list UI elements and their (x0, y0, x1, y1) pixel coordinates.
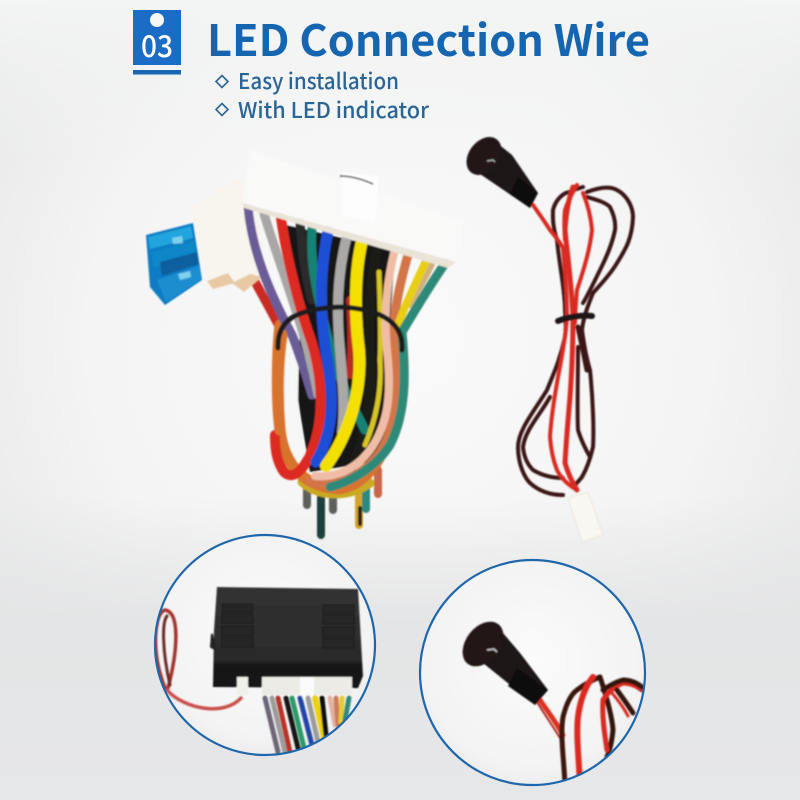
title: LED Connection Wire (207, 7, 650, 69)
bullet: Easy installation: Easy installation (238, 64, 399, 96)
wire stubs (307, 470, 378, 535)
fuse (146, 223, 202, 305)
wire bundle (248, 207, 446, 494)
circle: control box detail (155, 535, 375, 755)
colored wires (265, 698, 349, 752)
connector: main body (242, 150, 462, 268)
lamp (459, 130, 538, 208)
small tie (558, 316, 592, 321)
cable tie (278, 307, 402, 350)
black control box (213, 587, 363, 688)
white connectors (237, 677, 248, 695)
lamp (483, 626, 548, 705)
badge: 03: 03 (141, 22, 173, 66)
cables (537, 677, 642, 785)
bullet: With LED indicator: With LED indicator (238, 93, 430, 125)
wiring harness photo (146, 150, 462, 535)
LED cable: red strands (533, 185, 592, 490)
LED cable: dark strands (518, 187, 633, 495)
red loop wire (156, 610, 241, 709)
left red wire (252, 276, 282, 332)
badge: 03 (133, 10, 181, 74)
LED wire with lamp photo (459, 130, 633, 542)
circle: LED lamp detail (420, 560, 645, 785)
connector: side block (192, 157, 262, 291)
white plug (568, 492, 603, 542)
back wires: dark mass (285, 225, 402, 472)
